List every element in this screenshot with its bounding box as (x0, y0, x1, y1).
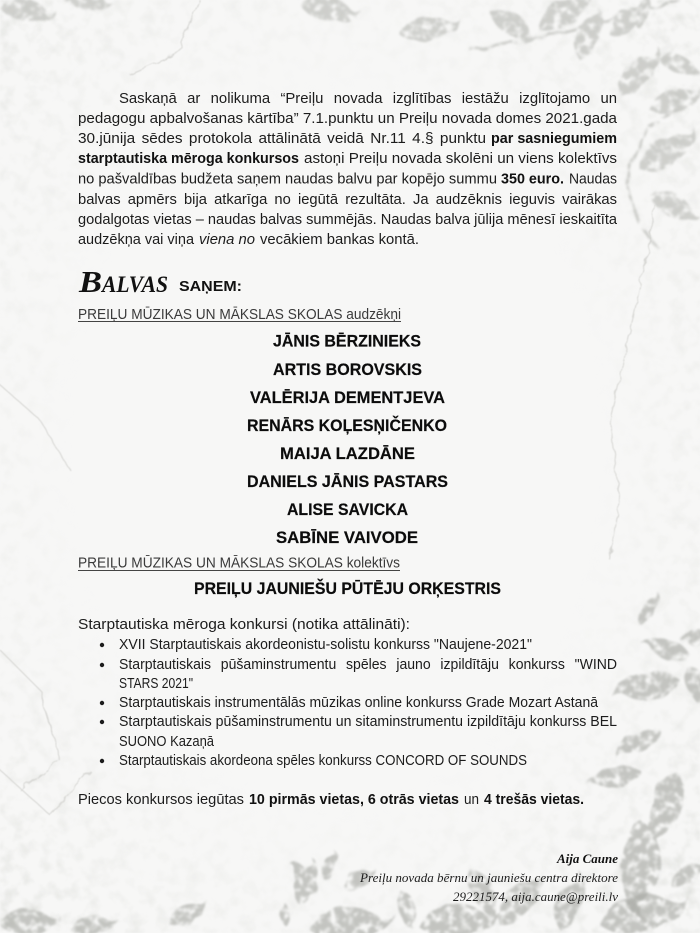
bullet 1: XVII Starptautiskais akordeonistu-solistu konkurss "Naujene-2021" (119, 637, 532, 653)
signature name: Aija Caune (556, 851, 618, 866)
name 3: VALĒRIJA DEMENTJEVA (250, 388, 445, 407)
line 5: no pašvaldības budžeta saņem naudas balvu par kopējo summu (78, 172, 497, 188)
line 2: pedagogu apbalvošanas kārtība” 7.1.punktu un Preiļu novada domes 2021.gada (78, 111, 617, 127)
line 5: 350 euro. (501, 172, 564, 188)
background: right foliage (583, 589, 700, 919)
bullet 4: SUONO Kazaņā (119, 734, 214, 750)
background: bottom foliage (0, 849, 694, 933)
background: top foliage (0, 0, 700, 250)
line 4 (78, 151, 617, 167)
signature role: Preiļu novada bērnu un jauniešu centra direktore (359, 870, 618, 885)
line 3: 30.jūnija sēdes protokola attālinātā veidā Nr.11 4.§ punktu (78, 131, 486, 147)
results summary (78, 792, 584, 808)
bullet 4: Starptautiskais pūšaminstrumentu un sitaminstrumentu izpildītāju konkurss BEL (119, 714, 617, 730)
signature block (359, 851, 618, 904)
line 1: Saskaņā ar nolikuma “Preiļu novada izglītības iestāžu izglītojamo un (119, 91, 617, 107)
heading: Balvas saņem (78, 264, 242, 299)
line 4: starptautiska mēroga konkursos (78, 151, 299, 167)
line 8: vecākiem bankas kontā. (260, 232, 419, 248)
bullet 4 (100, 714, 617, 750)
line 8: audzēkņa vai viņa (78, 232, 194, 248)
name 8: SABĪNE VAIVODE (276, 528, 418, 547)
heading: Balvas saņem: B (78, 264, 102, 299)
results summary: 4 trešās vietas. (484, 792, 584, 808)
bullet 5: Starptautiskais akordeona spēles konkurss CONCORD OF SOUNDS (119, 753, 527, 769)
competitions bullet list (100, 637, 617, 769)
line 8 (78, 232, 419, 248)
bullet 2: STARS 2021" (119, 676, 193, 692)
bullet 3: Starptautiskais instrumentālās mūzikas online konkurss Grade Mozart Astanā (119, 695, 598, 711)
competitions intro: Starptautiska mēroga konkursi (notika attālināti): (78, 617, 410, 633)
list of student names (247, 332, 448, 547)
name 1: JĀNIS BĒRZINIEKS (273, 332, 421, 350)
line 4: astoņi Preiļu novada skolēni un viens kolektīvs (304, 151, 617, 167)
intro paragraph (78, 91, 617, 248)
name 6: DANIELS JĀNIS PASTARS (247, 472, 448, 491)
line 7: godalgotas vietas – naudas balvas summējās. Naudas balva jūlija mēnesī ieskaitīta (78, 212, 617, 228)
signature contact: 29221574, aija.caune@preili.lv (453, 889, 618, 904)
line 8: viena no (199, 232, 255, 248)
collective name: PREIĻU JAUNIEŠU PŪTĒJU ORĶESTRIS (194, 579, 501, 598)
bullet 2 (100, 657, 617, 692)
line 3: par sasniegumiem (491, 131, 617, 147)
name 4: RENĀRS KOĻESŅIČENKO (247, 416, 447, 435)
results summary: un (464, 792, 479, 808)
name 5: MAIJA LAZDĀNE (280, 444, 415, 463)
name 2: ARTIS BOROVSKIS (273, 360, 422, 379)
name 7: ALISE SAVICKA (287, 500, 408, 519)
heading: Balvas saņem: ALVAS (100, 272, 168, 297)
results summary: 10 pirmās vietas, 6 otrās vietas (249, 792, 459, 808)
line 5: Naudas (569, 172, 617, 188)
subheading: collective: PREIĻU MŪZIKAS UN MĀKSLAS SKOLAS kolektīvs (78, 556, 400, 572)
line 6: balvas apmērs bija atkarīga no iegūtā rezultāta. Ja audzēknis ieguvis vairākas (78, 192, 617, 208)
bullet 2: Starptautiskais pūšaminstrumentu spēles jauno izpildītāju konkurss "WIND (119, 657, 617, 673)
heading: Balvas saņem: SAŅEM: (179, 279, 242, 295)
results summary: Piecos konkursos iegūtas (78, 792, 244, 808)
subheading: students: PREIĻU MŪZIKAS UN MĀKSLAS SKOLAS audzēkņi (78, 307, 401, 323)
